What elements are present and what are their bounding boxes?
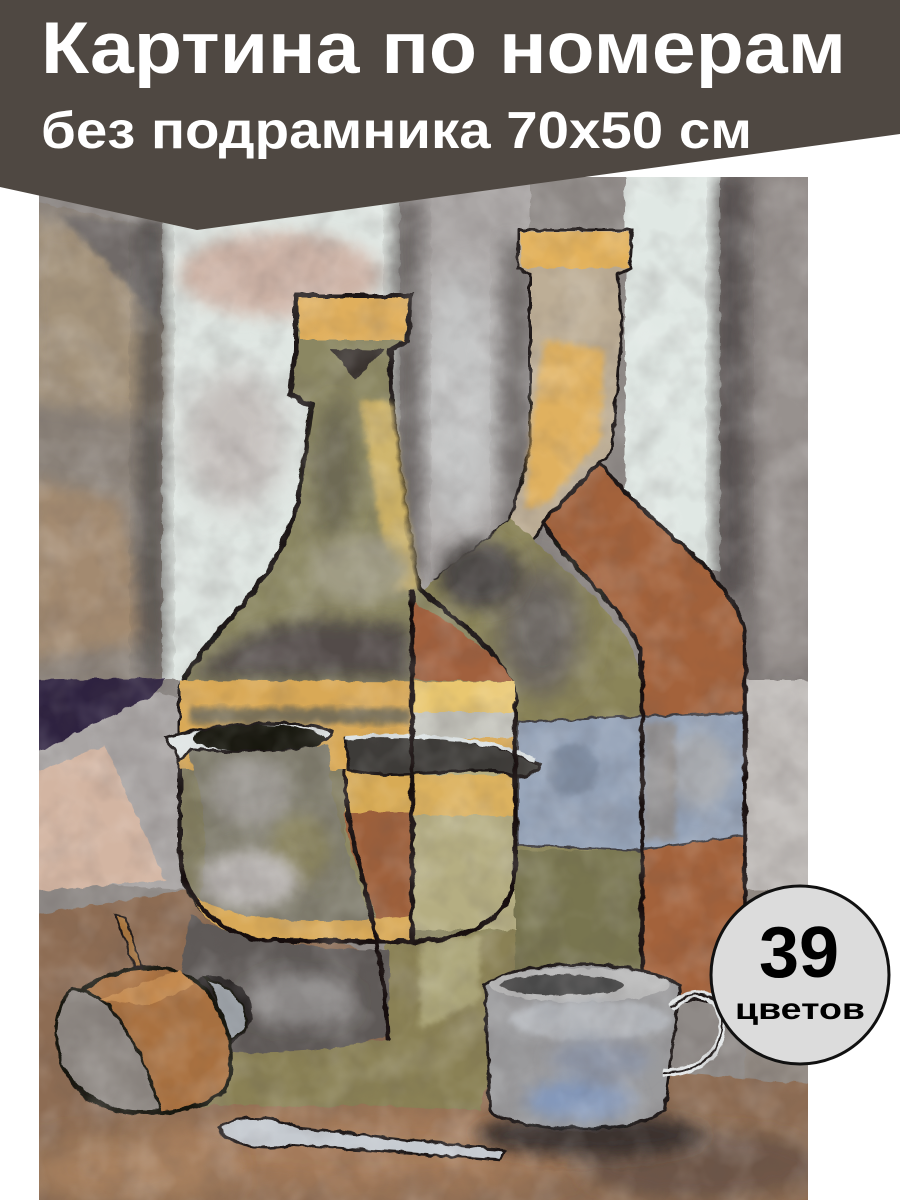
- background panels: [39, 177, 808, 892]
- title: Картина по номерам: [41, 8, 846, 89]
- spoon: [218, 1118, 505, 1160]
- lower body panels: [412, 770, 515, 930]
- bottle shoulder: [185, 620, 412, 680]
- back bottle: brown body: [543, 462, 745, 1000]
- badge: 39 colours: цветов: [735, 993, 865, 1026]
- table: [30, 890, 820, 1200]
- paint mottling: [39, 177, 808, 1200]
- jug rim: [165, 723, 332, 760]
- brown panel: [414, 602, 512, 682]
- apple: [59, 968, 231, 1114]
- painting: still life with bottles: [30, 170, 820, 1200]
- header banner: [0, 0, 900, 230]
- back bottle: yellow neck: [435, 230, 632, 580]
- badge: 39 colours: [711, 886, 889, 1064]
- centre olive under bottle: [202, 936, 488, 1111]
- cup: [475, 1113, 705, 1157]
- right jug rim: [345, 736, 540, 777]
- jug body: [188, 744, 369, 922]
- bottle neck cap: [298, 298, 408, 340]
- back bottle: olive body: [424, 518, 642, 970]
- front bottle: [180, 296, 515, 942]
- yellow band: [180, 680, 514, 770]
- badge: 39 colours: 39: [759, 913, 839, 993]
- highlight on neck: [360, 400, 418, 590]
- subtitle: без подрамника 70х50 см: [41, 102, 752, 160]
- outline lines: [180, 590, 745, 1040]
- jug base: [170, 915, 390, 1053]
- back bottle: blue label: [518, 712, 745, 850]
